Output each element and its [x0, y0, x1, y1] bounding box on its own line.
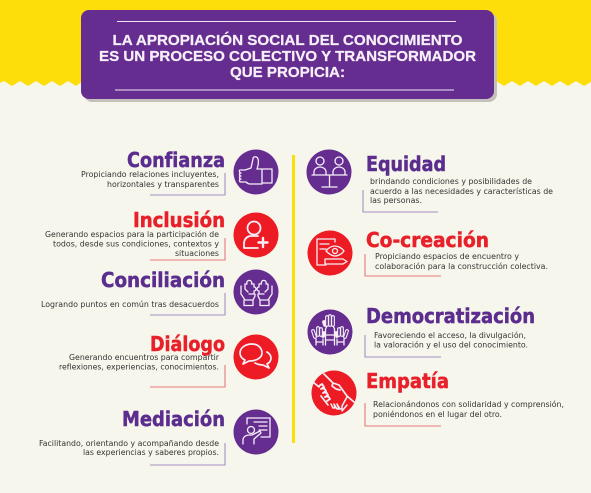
item: Empatía: poniéndonos en el lugar del otro.	[373, 409, 502, 419]
item: Democratización: la valoración y el uso del conocimiento.	[374, 340, 528, 350]
item: Diálogo	[59, 332, 278, 387]
item: Diálogo: Generando encuentros para compartir	[69, 353, 220, 362]
title text: ES UN PROCESO COLECTIVO Y TRANSFORMADOR	[99, 49, 477, 65]
item: Equidad: acuerdo a las necesidades y características de	[370, 187, 553, 196]
icon: document with eye and pencil	[308, 230, 352, 276]
item: Mediación: Facilitando, orientando y acompañando desde	[39, 439, 219, 448]
item: Inclusión: Inclusión	[133, 208, 225, 232]
icon: balance with two people	[306, 150, 352, 194]
item: Confianza: Confianza	[127, 148, 225, 172]
item: Mediación	[39, 407, 278, 465]
item: Inclusión	[45, 208, 278, 260]
item: Confianza: Propiciando relaciones incluyentes,	[81, 170, 219, 179]
item: Equidad: Equidad	[366, 152, 446, 176]
item: Inclusión: Generando espacios para la participación de	[45, 229, 219, 239]
item: Diálogo: reflexiones, experiencias, conocimientos.	[59, 362, 219, 372]
yellow zigzag top band	[0, 0, 591, 86]
title text: LA APROPIACIÓN SOCIAL DEL CONOCIMIENTO	[112, 31, 462, 49]
icon: speech bubbles	[234, 334, 278, 380]
icon: clasped hands	[312, 370, 356, 416]
item: Diálogo: Diálogo	[150, 332, 225, 356]
icon: hands holding puzzle pieces	[234, 270, 278, 314]
icon: person plus	[234, 212, 278, 258]
item: Democratización	[308, 304, 535, 357]
item: Confianza: horizontales y transparentes	[107, 180, 219, 189]
icon: raised hands	[308, 310, 352, 354]
item: Conciliación: Logrando puntos en común tras desacuerdos	[41, 300, 219, 309]
icon: thumbs up	[234, 150, 278, 194]
item: Conciliación	[41, 268, 278, 315]
item: Mediación: Mediación	[122, 407, 225, 431]
item: Empatía: Relacionándonos con solidaridad y comprensión,	[373, 399, 564, 409]
item: Inclusión: situaciones	[175, 249, 219, 258]
item: Equidad: las personas.	[370, 196, 422, 205]
item: Confianza	[81, 148, 278, 195]
item: Mediación: las experiencias y saberes propios.	[83, 448, 219, 457]
item: Empatía	[312, 369, 564, 426]
item: Democratización: Democratización	[366, 304, 535, 328]
item: Co-creación: Propiciando espacios de encuentro y	[375, 252, 519, 261]
title banner	[81, 10, 497, 102]
icon: teacher at board	[234, 410, 278, 454]
item: Co-creación: Co-creación	[366, 228, 489, 252]
item: Conciliación: Conciliación	[101, 268, 225, 292]
item: Equidad	[306, 150, 553, 212]
item: Equidad: brindando condiciones y posibilidades de	[370, 177, 532, 186]
title text: QUE PROPICIA:	[230, 65, 345, 81]
item: Co-creación	[308, 228, 548, 276]
item: Inclusión: todos, desde sus condiciones, contextos y	[53, 240, 219, 248]
item: Democratización: Favoreciendo el acceso, la divulgación,	[374, 330, 526, 340]
item: Co-creación: colaboración para la construcción colectiva.	[375, 261, 548, 271]
central yellow divider	[292, 155, 295, 443]
title text	[99, 31, 477, 81]
item: Empatía: Empatía	[366, 369, 449, 393]
